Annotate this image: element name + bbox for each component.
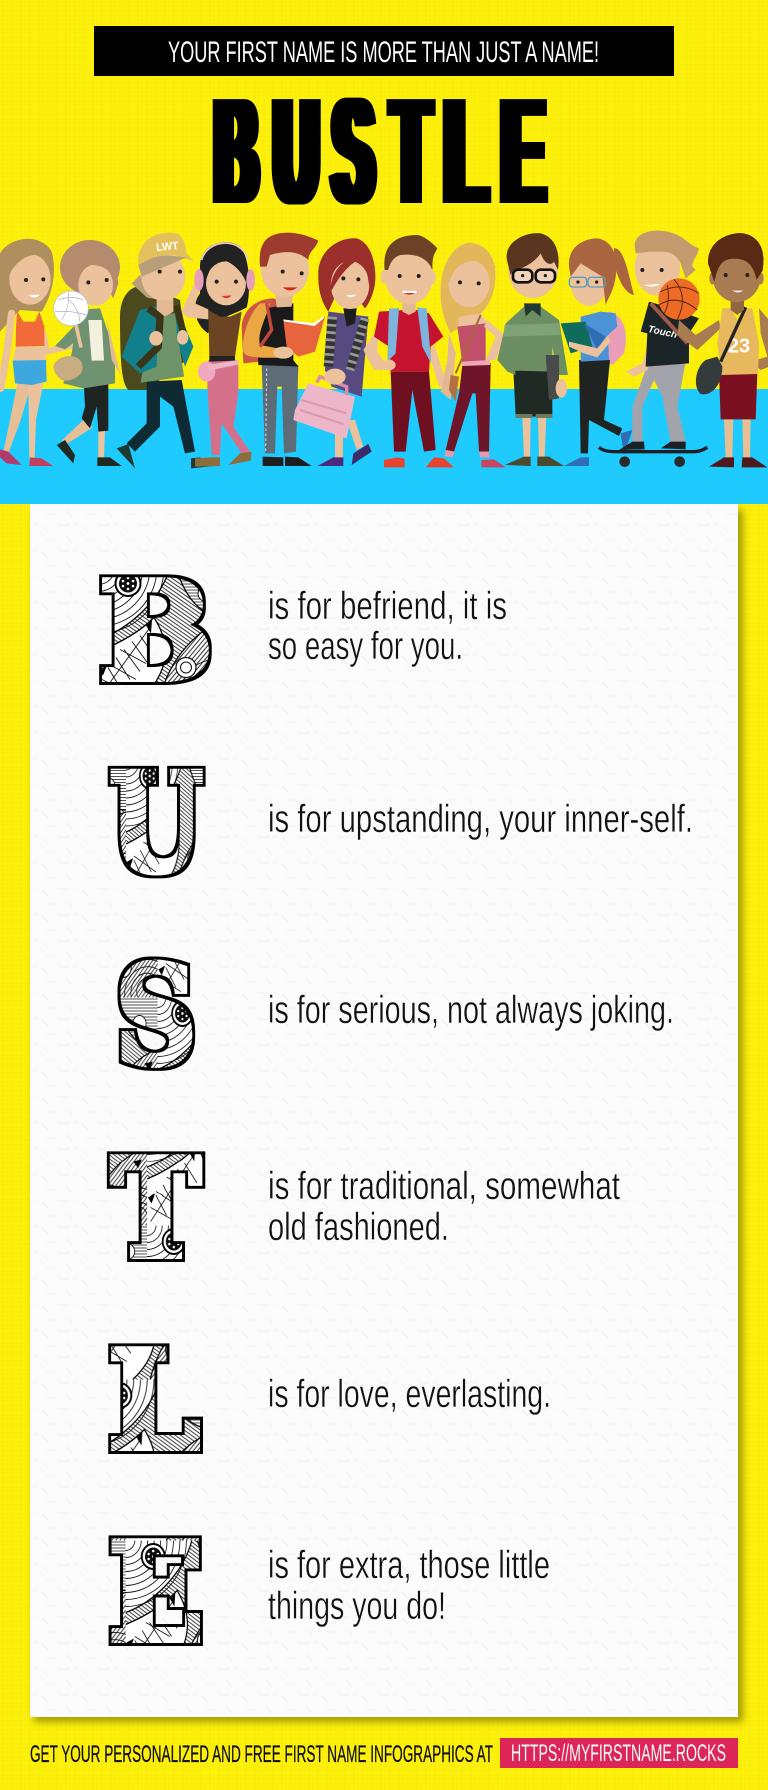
text for T: old fashioned. [268, 1206, 449, 1249]
person 3: hiker with cap and backpack: LWT [156, 240, 180, 254]
blue floor band [0, 389, 768, 504]
white panel shadow [34, 510, 743, 1722]
person 10: girl with ponytail and tablet [561, 238, 634, 466]
person 4: girl with headphones [182, 242, 255, 467]
text for B: so easy for you. [268, 625, 463, 668]
row B: letter and text [99, 552, 507, 710]
person 1: girl in orange top [0, 239, 75, 466]
row E: letter and text [109, 1515, 550, 1672]
title: BUSTLE: L [444, 67, 487, 235]
title: BUSTLE: S [333, 68, 373, 236]
text for L: is for love, everlasting. [268, 1373, 551, 1416]
title: BUSTLE: U [274, 68, 318, 236]
illustration: group of twelve young people [0, 231, 768, 468]
zentangle letter T: T [112, 1130, 200, 1287]
person 8: blonde girl [441, 243, 506, 467]
person 7: boy in red tee [363, 235, 454, 467]
text for B: is for befriend, it is [268, 585, 507, 628]
person 11: skater with basketball [599, 231, 721, 467]
text for E [268, 1544, 550, 1628]
person 5: boy reading orange book [242, 233, 325, 466]
person 9: boy with glasses in green sweater [497, 233, 568, 466]
text for T [268, 1165, 620, 1249]
zentangle letter E: E [109, 1515, 203, 1672]
zentangle letter L: L [109, 1322, 199, 1480]
person 11: skater with basketball: Touch [647, 324, 678, 341]
people right half [363, 231, 768, 467]
title: BUSTLE: T [392, 68, 430, 236]
title: BUSTLE: B [215, 67, 257, 236]
title: BUSTLE: E [502, 66, 544, 236]
row L: letter and text [109, 1322, 551, 1480]
text for E: things you do! [268, 1585, 446, 1628]
title: BUSTLE [215, 66, 544, 236]
zentangle letter S: S [116, 937, 196, 1094]
text for E: is for extra, those little [268, 1544, 550, 1587]
zentangle letter U: U [110, 746, 202, 902]
person 12: boy in yellow tank with satchel [696, 235, 768, 467]
person 6: girl in purple with pink bag [293, 238, 375, 466]
zentangle letter B: B [99, 552, 213, 710]
text for T: is for traditional, somewhat [268, 1165, 620, 1208]
row U: letter and text [110, 746, 693, 902]
white content panel [30, 504, 738, 1717]
person 3: hiker with cap and backpack [117, 233, 213, 468]
row T: letter and text [112, 1130, 620, 1287]
row S: letter and text [116, 937, 674, 1094]
people left half [0, 233, 375, 468]
text for B [268, 585, 507, 668]
top black banner [94, 26, 674, 76]
person 2: girl with volleyball [53, 240, 122, 466]
person 12: boy in yellow tank with satchel: 23 [728, 336, 750, 358]
